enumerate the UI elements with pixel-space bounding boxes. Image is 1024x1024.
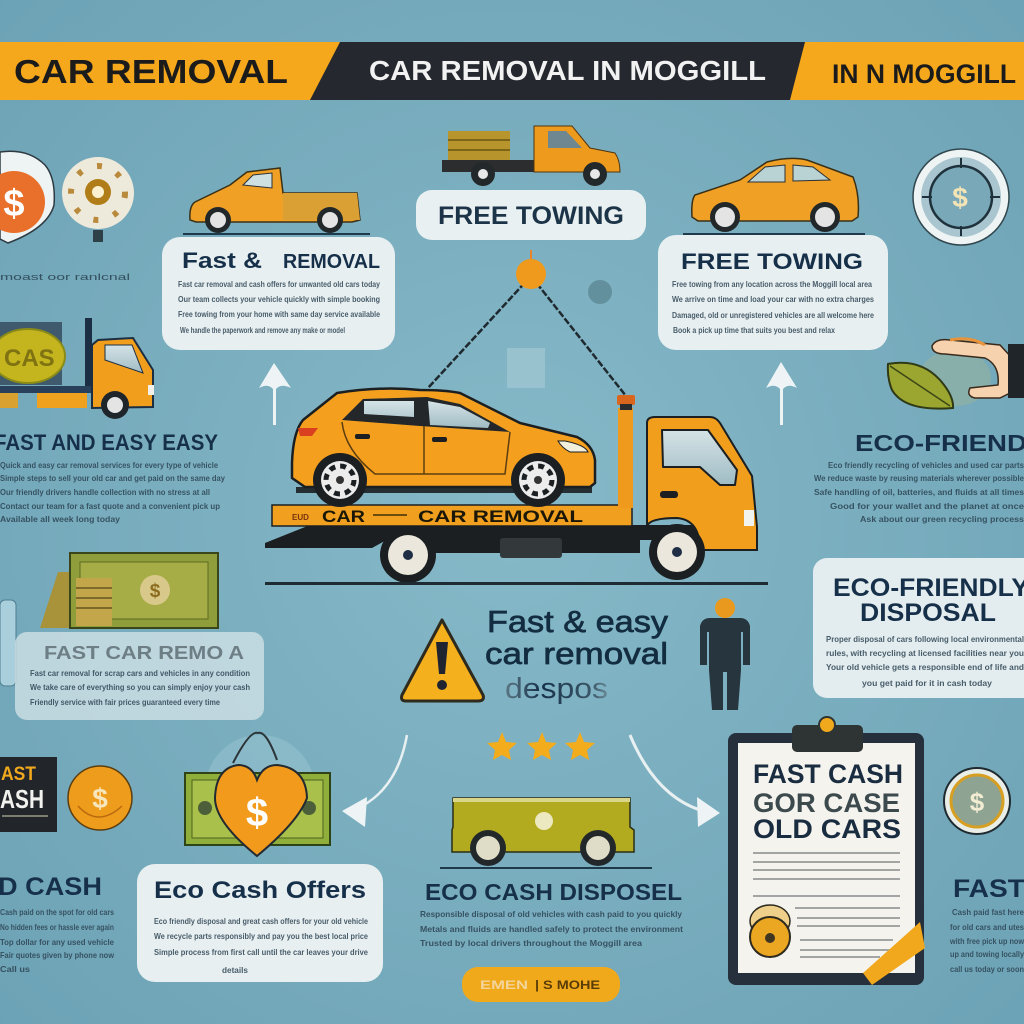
icon: clipboard: GOR CASE xyxy=(753,788,900,818)
truck chassis xyxy=(265,525,757,558)
panel: fast removal: Fast & xyxy=(182,248,262,273)
truck cab xyxy=(647,417,757,550)
badge: moggill pill: EMEN xyxy=(480,978,528,992)
panel: fast removal: Free towing from your home with same day service available xyxy=(178,309,380,319)
text block: fast and easy: Our friendly drivers handle collection with no stress at all xyxy=(0,487,210,497)
text block: fast and easy: Quick and easy car removal services for every type of vehicle xyxy=(0,460,218,470)
icon: tow truck left: CAS xyxy=(4,345,55,372)
icon: shield with dollar: $ xyxy=(3,183,25,225)
icon: warning triangle xyxy=(402,620,483,701)
icon: heart with dollar and bill: $ xyxy=(246,791,268,835)
icon: gear medallion xyxy=(62,157,134,242)
panel: fast car removal: Fast car removal for scrap cars and vehicles in any condition xyxy=(30,668,250,678)
panel: fast removal: Our team collects your vehicle quickly with simple booking xyxy=(178,294,380,304)
icon: water bottle edge xyxy=(0,600,16,686)
panel: free towing details: Free towing from any location across the Moggill local area xyxy=(672,279,872,289)
truck bed: CAR xyxy=(322,507,365,526)
panel: eco cash offers: Simple process from first call until the car leaves your drive xyxy=(154,947,368,957)
panel: fast car removal xyxy=(15,632,264,720)
panel: fast removal: REMOVAL xyxy=(283,251,380,273)
text block: old cash xyxy=(0,873,114,974)
icon: person xyxy=(700,598,750,710)
text block: fast and easy: Available all week long today xyxy=(0,514,120,524)
panel: eco cash offers xyxy=(137,864,383,982)
badge: moggill pill: | S MOHE xyxy=(535,978,600,992)
text block: fast and easy xyxy=(0,430,225,524)
arrow: curve right xyxy=(630,735,720,827)
panel: eco cash offers: Eco Cash Offers xyxy=(154,877,366,904)
icon: cash bill: $ xyxy=(150,581,161,602)
icon: clipboard: OLD CARS xyxy=(753,814,901,844)
text block: eco friendly: Good for your wallet and the planet at once xyxy=(830,501,1024,511)
panel: eco cash offers: We recycle parts responsibly and pay you the best local price xyxy=(154,931,368,941)
icon: clipboard: FAST CASH xyxy=(753,759,903,789)
text block: eco cash disposel: ECO CASH DISPOSEL xyxy=(425,879,682,905)
panel: fast car removal: FAST CAR REMO A xyxy=(44,643,244,663)
text block: fast xyxy=(949,875,1024,974)
text block: fast and easy: Simple steps to sell your old car and get paid on the same day xyxy=(0,473,225,483)
icon: tow truck left xyxy=(0,318,154,419)
rating stars xyxy=(487,732,595,760)
panel: eco friendly disposal: you get paid for it in cash today xyxy=(862,678,992,688)
icon: dollar coin orange: $ xyxy=(92,783,108,814)
icon: target coin xyxy=(913,149,1009,245)
text block: eco cash disposel: Responsible disposal of old vehicles with cash paid to you quickly xyxy=(420,909,682,919)
text block: old cash: Cash paid on the spot for old cars xyxy=(0,907,114,917)
panel: eco cash offers: details xyxy=(222,965,248,975)
text block: eco friendly: Safe handling of oil, batteries, and fluids at all times xyxy=(814,487,1024,497)
panel: fast removal: We handle the paperwork and remove any make or model xyxy=(180,325,345,335)
badge: moggill pill xyxy=(462,967,620,1002)
text block: eco cash disposel xyxy=(420,879,683,948)
panel: fast car removal: We take care of everything so you can simply enjoy your cash xyxy=(30,682,250,692)
text block: old cash: Fair quotes given by phone now xyxy=(0,950,114,960)
caption: low cost car removal: moast oor ranlcnal xyxy=(0,272,130,283)
icon: cash bill xyxy=(40,553,218,628)
truck bed xyxy=(272,395,635,526)
main tow truck with car xyxy=(265,389,768,585)
text block: old cash: No hidden fees or hassle ever again xyxy=(0,922,114,932)
panel: fast removal xyxy=(162,237,395,350)
truck wheels xyxy=(380,524,705,583)
orange hatchback car xyxy=(292,389,595,507)
text block: eco cash disposel: Trusted by local drivers throughout the Moggill area xyxy=(420,938,642,948)
arrow: up left xyxy=(259,363,291,425)
icon: fast cash sign xyxy=(0,757,57,832)
icon: dollar coin right xyxy=(944,768,1010,834)
title banner xyxy=(0,42,1024,100)
icon: hand and leaf xyxy=(888,339,1024,409)
icon: orange hatchback top right xyxy=(683,158,865,235)
headline: fast and easy car removal: despos xyxy=(505,673,608,705)
icon: dollar coin right: $ xyxy=(970,787,985,817)
panel: fast removal: Fast car removal and cash offers for unwanted old cars today xyxy=(178,279,380,289)
panel: eco friendly disposal: Your old vehicle gets a responsible end of life and xyxy=(826,662,1024,672)
truck bed: EUD xyxy=(292,513,309,522)
icon: orange pickup truck xyxy=(183,168,370,235)
panel: free towing pill: FREE TOWING xyxy=(438,202,624,230)
text block: fast: FAST xyxy=(953,875,1024,903)
text block: old cash: Top dollar for any used vehicle xyxy=(0,937,114,947)
panel: free towing details: We arrive on time and load your car with no extra charges xyxy=(672,294,874,304)
icon: fast cash sign: AST xyxy=(1,764,36,785)
panel: free towing details: FREE TOWING xyxy=(681,249,863,274)
text block: fast and easy: Contact our team for a fast quote and a convenient pick up xyxy=(0,501,220,511)
icon: heart with dollar and bill xyxy=(185,733,330,856)
ground line xyxy=(265,582,768,585)
arrow: curve left xyxy=(342,735,407,827)
text block: eco cash disposel: Metals and fluids are handled safely to protect the environment xyxy=(420,924,683,934)
title banner: CAR REMOVAL IN MOGGILL xyxy=(369,55,766,86)
text block: eco friendly xyxy=(814,430,1024,524)
arrow: up right xyxy=(766,362,797,425)
title banner: CAR REMOVAL xyxy=(14,53,288,90)
icon: target coin: $ xyxy=(952,182,968,213)
panel: free towing details xyxy=(658,235,888,350)
panel: eco friendly disposal: DISPOSAL xyxy=(860,599,996,627)
icon: fast cash sign: ASH xyxy=(0,784,44,814)
title banner: IN N MOGGILL xyxy=(832,59,1016,89)
panel: free towing pill xyxy=(416,190,646,240)
text block: old cash: Call us xyxy=(0,964,30,974)
headline: fast and easy car removal: Fast & easy xyxy=(487,604,669,639)
panel: eco friendly disposal: rules, with recycling at licensed facilities near you xyxy=(826,648,1024,658)
text block: fast and easy: FAST AND EASY EASY xyxy=(0,430,218,455)
icon: crane hoist xyxy=(428,250,626,396)
panel: eco friendly disposal: ECO-FRIENDLY xyxy=(833,574,1024,602)
panel: eco friendly disposal xyxy=(813,558,1024,698)
headline: fast and easy car removal: car removal xyxy=(485,636,668,671)
text block: eco friendly: Ask about our green recycling process xyxy=(860,514,1024,524)
icon: clipboard xyxy=(728,717,925,985)
icon: flatbed truck top center xyxy=(442,126,620,186)
truck bed: CAR REMOVAL xyxy=(418,507,583,526)
text block: eco friendly: ECO-FRIEND xyxy=(855,430,1024,456)
headline: fast and easy car removal xyxy=(485,604,669,705)
panel: free towing details: Book a pick up time that suits you best and relax xyxy=(673,325,835,335)
panel: fast car removal: Friendly service with fair prices guaranteed every time xyxy=(30,697,220,707)
text block: old cash: D CASH xyxy=(0,873,102,901)
icon: olive van xyxy=(440,798,652,869)
icon: shield with dollar xyxy=(0,151,54,243)
panel: eco cash offers: Eco friendly disposal and great cash offers for your old vehicle xyxy=(154,916,368,926)
icon: dollar coin orange xyxy=(68,766,132,830)
panel: free towing details: Damaged, old or unregistered vehicles are all welcome here xyxy=(672,310,874,320)
